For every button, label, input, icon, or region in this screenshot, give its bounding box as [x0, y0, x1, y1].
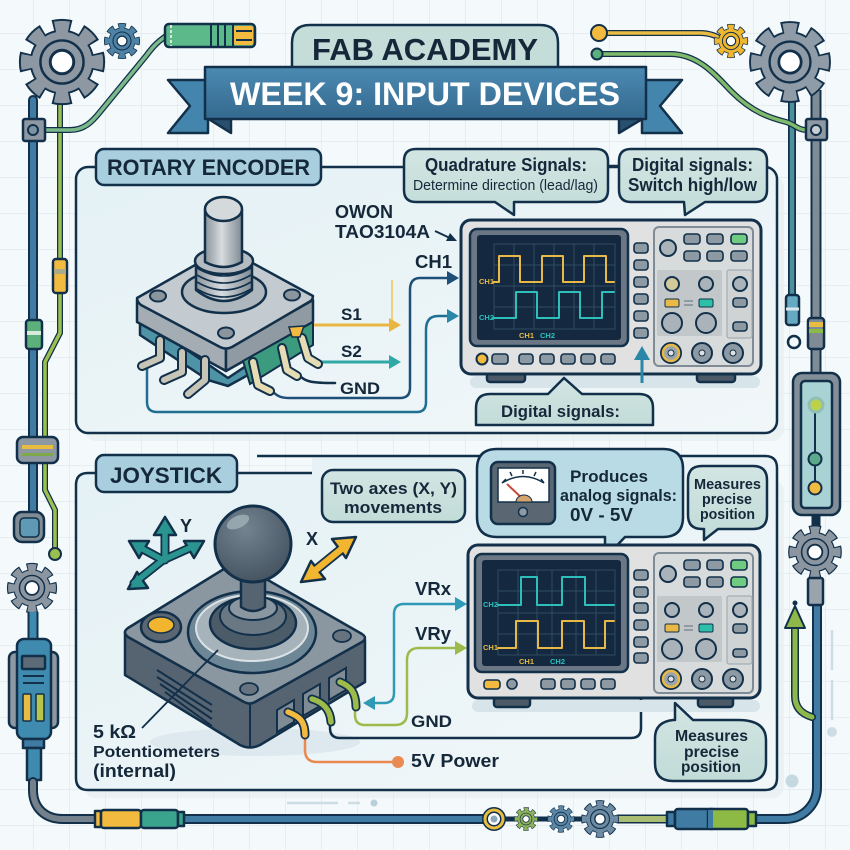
green up arrow — [785, 600, 812, 717]
callout: digital signals: Digital signals: — [501, 402, 620, 421]
oscilloscope: joystick: CH1 — [519, 657, 534, 666]
encoder shaft — [205, 210, 242, 267]
oscilloscope: rotary encoder: CH1 — [479, 277, 494, 286]
green cable connector — [165, 24, 255, 47]
callout: measures precise position top: precise — [702, 492, 752, 508]
oscilloscope model label: TAO3104A — [335, 222, 430, 242]
encoder base — [140, 318, 312, 386]
oscilloscope: rotary encoder: CH2 — [479, 313, 494, 322]
panel: rotary encoder — [76, 167, 784, 441]
connector between callouts — [608, 165, 619, 167]
left control device — [9, 612, 58, 780]
joystick wiring: VRy — [415, 624, 451, 644]
pointer and potentiometer label: 5 kΩ — [93, 722, 136, 742]
heading: rotary encoder — [96, 149, 321, 185]
callout: two axes — [322, 470, 465, 522]
gear: small yellow — [717, 27, 745, 55]
heading: joystick — [96, 455, 237, 492]
callout: digital signals — [476, 378, 653, 425]
joystick illustration — [125, 506, 365, 748]
icon: X axis arrow — [301, 529, 356, 582]
oscilloscope model label: OWON — [335, 202, 393, 222]
title tab — [292, 25, 558, 70]
oscilloscope: joystick: CH1 — [483, 643, 498, 652]
callout: two axes: Two axes (X, Y) — [330, 479, 457, 498]
arrow: blue pointer to scope — [634, 346, 650, 383]
joystick floor shadow — [150, 728, 360, 756]
encoder collar — [182, 271, 266, 313]
encoder wiring: S2 — [341, 342, 362, 361]
title tab: FAB ACADEMY — [312, 32, 538, 67]
gear: small blue — [107, 26, 137, 56]
control panel — [654, 227, 753, 366]
callout: measures precise position bottom: position — [681, 759, 741, 776]
waveform: VRx — [498, 577, 614, 605]
encoder body sides — [137, 300, 226, 371]
callout: quadrature signals — [404, 149, 608, 215]
callout: measures precise position top: position — [700, 507, 755, 523]
title banner — [168, 67, 682, 133]
callout: two axes: movements — [344, 498, 442, 517]
joystick base sides — [125, 632, 365, 748]
callout: analog signals with meter: Produces — [570, 467, 648, 486]
callout: measures precise position bottom: Measures — [675, 728, 748, 745]
icon: Y axis arrows — [128, 516, 204, 589]
callout: digital signals switch — [619, 149, 767, 215]
pointer and potentiometer label — [93, 650, 220, 781]
callout: quadrature signals: Determine direction (lead/lag) — [413, 178, 598, 194]
title banner: WEEK 9: INPUT DEVICES — [230, 76, 620, 112]
joystick ports and plugs — [277, 668, 346, 732]
encoder wiring: GND — [340, 379, 380, 398]
joystick stick — [241, 572, 265, 611]
callout: digital signals switch: Switch high/low — [628, 175, 758, 195]
control panel — [654, 553, 753, 693]
callout: measures precise position bottom — [655, 703, 766, 781]
encoder pins — [142, 338, 318, 394]
gear: right lower — [793, 515, 837, 605]
callout: measures precise position top — [688, 466, 767, 540]
callout: analog signals with meter: 0V - 5V — [570, 505, 633, 525]
encoder wiring: CH1 — [415, 252, 452, 272]
oscilloscope: joystick: CH2 — [550, 657, 565, 666]
heading: rotary encoder: ROTARY ENCODER — [107, 155, 310, 180]
joystick top plate — [125, 563, 365, 704]
callout: quadrature signals: Quadrature Signals: — [425, 155, 587, 175]
oscilloscope: rotary encoder: CH1 — [519, 331, 534, 340]
encoder wiring — [147, 252, 459, 412]
pointer and potentiometer label: Potentiometers — [93, 744, 220, 761]
joystick wiring: VRx — [415, 579, 451, 599]
callout: measures precise position top: Measures — [694, 477, 761, 493]
encoder wiring: S1 — [341, 305, 362, 324]
left cable rail — [14, 36, 166, 560]
connectors: bottom gear chain — [485, 804, 615, 834]
oscilloscope: rotary encoder: CH2 — [540, 331, 555, 340]
waveform: VRy — [498, 621, 614, 648]
joystick wiring — [305, 579, 649, 771]
callout: analog signals with meter — [477, 449, 683, 558]
callout: measures precise position bottom: precise — [684, 744, 739, 761]
oscilloscope: rotary encoder — [461, 220, 761, 388]
joystick wiring: 5V Power — [411, 751, 499, 771]
oscilloscope: joystick: CH2 — [483, 600, 498, 609]
status device on right rail — [793, 373, 840, 515]
callout: analog signals with meter: analog signals: — [560, 486, 677, 505]
gear: top left — [27, 27, 97, 97]
encoder top plate — [137, 248, 313, 348]
gear: lower left — [11, 567, 53, 609]
rotary encoder illustration — [137, 197, 318, 394]
waveform: CH1 — [493, 256, 614, 282]
pointer and potentiometer label: (internal) — [93, 761, 176, 781]
bottom cable rail — [33, 600, 817, 829]
icon: Y axis arrows: Y — [180, 516, 192, 536]
joystick gimbal — [188, 591, 316, 673]
right cable rail — [591, 25, 827, 374]
gear: top right — [757, 29, 823, 95]
callout: digital signals switch: Digital signals: — [632, 155, 753, 175]
waveform: CH2 — [493, 292, 614, 318]
oscilloscope: joystick — [468, 545, 760, 712]
icon: analog meter — [491, 462, 555, 524]
icon: X axis arrow: X — [306, 529, 318, 549]
decorative pale marks — [287, 630, 837, 806]
heading: joystick: JOYSTICK — [110, 463, 222, 488]
joystick wiring: GND — [411, 712, 452, 731]
panel: joystick — [76, 456, 784, 798]
oscilloscope model label — [335, 202, 457, 242]
joystick ball — [215, 506, 291, 582]
